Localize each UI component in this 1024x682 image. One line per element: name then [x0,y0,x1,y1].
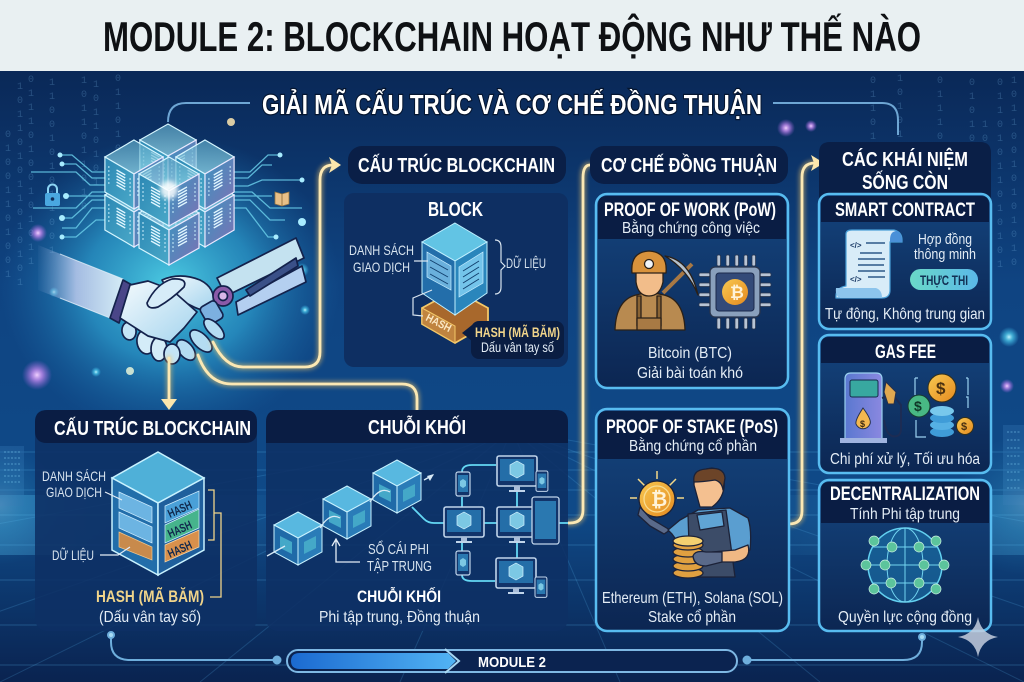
connector lines [413,240,505,316]
subheading: Bằng chứng cổ phần [629,436,757,455]
binary rain [2,74,1020,292]
binary rain: 01101011010101 [994,78,1006,274]
icon: person staking coins [630,468,751,578]
label: transactions [42,468,106,500]
subheading: Bằng chứng công việc [622,218,760,237]
panel header [35,410,257,443]
icon: person staking coins: ₿ [651,489,667,511]
binary rain: 1100101011001 [46,78,58,260]
fingers [201,316,227,342]
panel: gas fee [819,335,991,473]
icon: book [275,192,289,206]
description: Giải bài toán khó [637,365,743,382]
button: execute [910,269,978,290]
panel: core concepts heading [819,142,991,200]
heading: block: BLOCK [428,199,483,221]
panel: block structure heading [348,146,566,184]
heading: SMART CONTRACT [835,200,975,221]
icon: coins and token stack [908,374,974,437]
panel header [821,196,989,222]
binary rain: 01001101001 [2,130,14,284]
label: smart contract: thông minh [914,246,976,263]
progress bar: module 2: MODULE 2 [478,654,546,671]
callout: hash: HASH (MÃ BĂM) [475,323,560,340]
icon: fuel pump [840,373,901,443]
icon: code scroll [836,230,902,298]
label: decentralized ledger: SỔ CÁI PHI [368,540,429,558]
icon: code scroll: </> [850,275,862,284]
panel: proof of work [596,194,788,388]
icon: code scroll: </> [850,241,862,250]
panel header [598,411,787,459]
label: transactions [349,242,414,275]
panel: core concepts heading: CÁC KHÁI NIỆM [842,147,968,171]
label: smart contract: Hợp đồng [918,231,972,248]
binary rain: 1001 [980,120,990,176]
description [602,590,783,626]
icon: bitcoin chip: ₿ [730,283,744,302]
label: hash: HASH (MÃ BĂM) [96,586,204,606]
icon: bitcoin chip [699,255,771,329]
subtitle: GIẢI MÃ CẤU TRÚC VÀ CƠ CHẾ ĐỒNG THUẬN [262,88,762,120]
binary rain: 101101011010101 [14,82,26,292]
icon: large block with hash layers: HASH [166,518,194,541]
right hand back [162,276,213,310]
right robot arm [217,238,304,296]
binary rain: 0101011 [966,78,978,176]
binary rain: 011010 [112,74,124,158]
icon: large block with hash layers: HASH [166,538,194,561]
panel header [821,482,989,523]
circuit traces [31,155,302,237]
description: Ethereum (ETH), Solana (SOL) [602,590,783,607]
binary rain: 01110100101011 [26,75,36,271]
binary rain: 10110101 [90,80,102,192]
arrow: hand to block structure [213,165,333,367]
label: smart contract [914,231,976,263]
icon: coins and token stack: $ [936,379,946,398]
label: decentralized ledger: TẬP TRUNG [367,558,432,575]
icon: sparkle watermark [958,617,998,657]
label: decentralized ledger [367,540,432,575]
binary rain: 10101 [894,74,906,144]
description [637,345,743,382]
connector arrows [161,155,824,524]
icon: hash base: HASH [424,312,453,335]
panel: core concepts heading: SỐNG CÒN [862,170,948,194]
icon: node globe [861,528,949,602]
icon: large block with hash layers: HASH [166,498,194,521]
description: Bitcoin (BTC) [648,345,732,362]
icon: lock [45,184,60,206]
label lines and brackets [100,492,130,555]
panel: blockchain structure [35,410,257,631]
icon: coins and token stack: $ [961,421,967,433]
heading: PROOF OF WORK (PoW) [604,200,776,221]
label: data: DỮ LIỆU [506,255,546,271]
bottom connector lines [108,632,925,664]
icon: large block with hash layers [112,452,204,575]
panel header [821,337,989,363]
icon: miner [615,251,698,330]
illustration: robot handshake [38,238,306,364]
panel: chain [266,410,568,631]
icon: hash base [422,290,488,343]
left robot arm [38,245,123,318]
heading: CHUỖI KHỐI [368,415,466,439]
heading: DECENTRALIZATION [830,484,980,505]
panel: decentralization [819,480,991,631]
progress bar: module 2 [287,649,737,673]
subheading: Tính Phi tập trung [850,506,960,523]
binary rain: 10110010101010 [1008,76,1020,272]
subtitle connector lines [168,103,898,135]
binary rain: 1011011010 [78,76,90,216]
binary rain: 01110110 [934,76,946,188]
heading: CẤU TRÚC BLOCKCHAIN [54,416,251,440]
label: data: DỮ LIỆU [52,547,94,563]
description: Quyền lực cộng đồng [838,609,972,626]
panel: proof of stake [596,409,789,631]
heading: PROOF OF STAKE (PoS) [606,417,778,438]
left hand [120,281,197,342]
arrow: hand to chain [198,355,417,410]
binary rain: 01101 [868,76,878,146]
panel: consensus heading: CƠ CHẾ ĐỒNG THUẬN [601,153,777,177]
network lines [412,465,568,581]
title bar [0,0,1024,71]
icon: data block cube [422,223,487,315]
panel: smart contract [819,194,991,329]
callout: hash: Dấu vân tay số [481,340,554,355]
panel header [266,410,568,443]
panel: block [344,193,568,367]
decorative lights [22,118,1019,393]
callout: hash [462,321,564,359]
panel header [598,196,786,239]
panel: consensus heading [590,146,788,184]
description: Chi phí xử lý, Tối ưu hóa [830,451,980,468]
label: transactions: GIAO DỊCH [46,484,102,500]
icon: fuel pump: $ [860,419,865,429]
network of devices [444,456,559,597]
label: fingerprint: (Dấu vân tay số) [99,609,201,626]
arrow: consensus to concepts [789,163,815,524]
arrow: hand down [168,358,170,402]
panel: block structure heading: CẤU TRÚC BLOCKCHAIN [358,153,555,177]
description: Tự động, Không trung gian [825,306,985,323]
label arrow [332,539,360,562]
label: transactions: GIAO DỊCH [353,259,410,275]
label: transactions: DANH SÁCH [42,468,106,484]
icon: coins and token stack: $ [914,398,922,414]
description: Phi tập trung, Đồng thuận [319,609,480,626]
arrow: chain to consensus [568,165,590,523]
description: Stake cổ phần [648,608,736,626]
thumb [147,279,185,308]
label: chain: CHUỖI KHỐI [357,586,441,606]
illustration: glass block cluster [31,124,306,265]
chain of blocks [267,460,434,565]
button: execute: THỰC THI [920,272,968,288]
label: transactions: DANH SÁCH [349,242,414,258]
heading: GAS FEE [875,342,936,363]
